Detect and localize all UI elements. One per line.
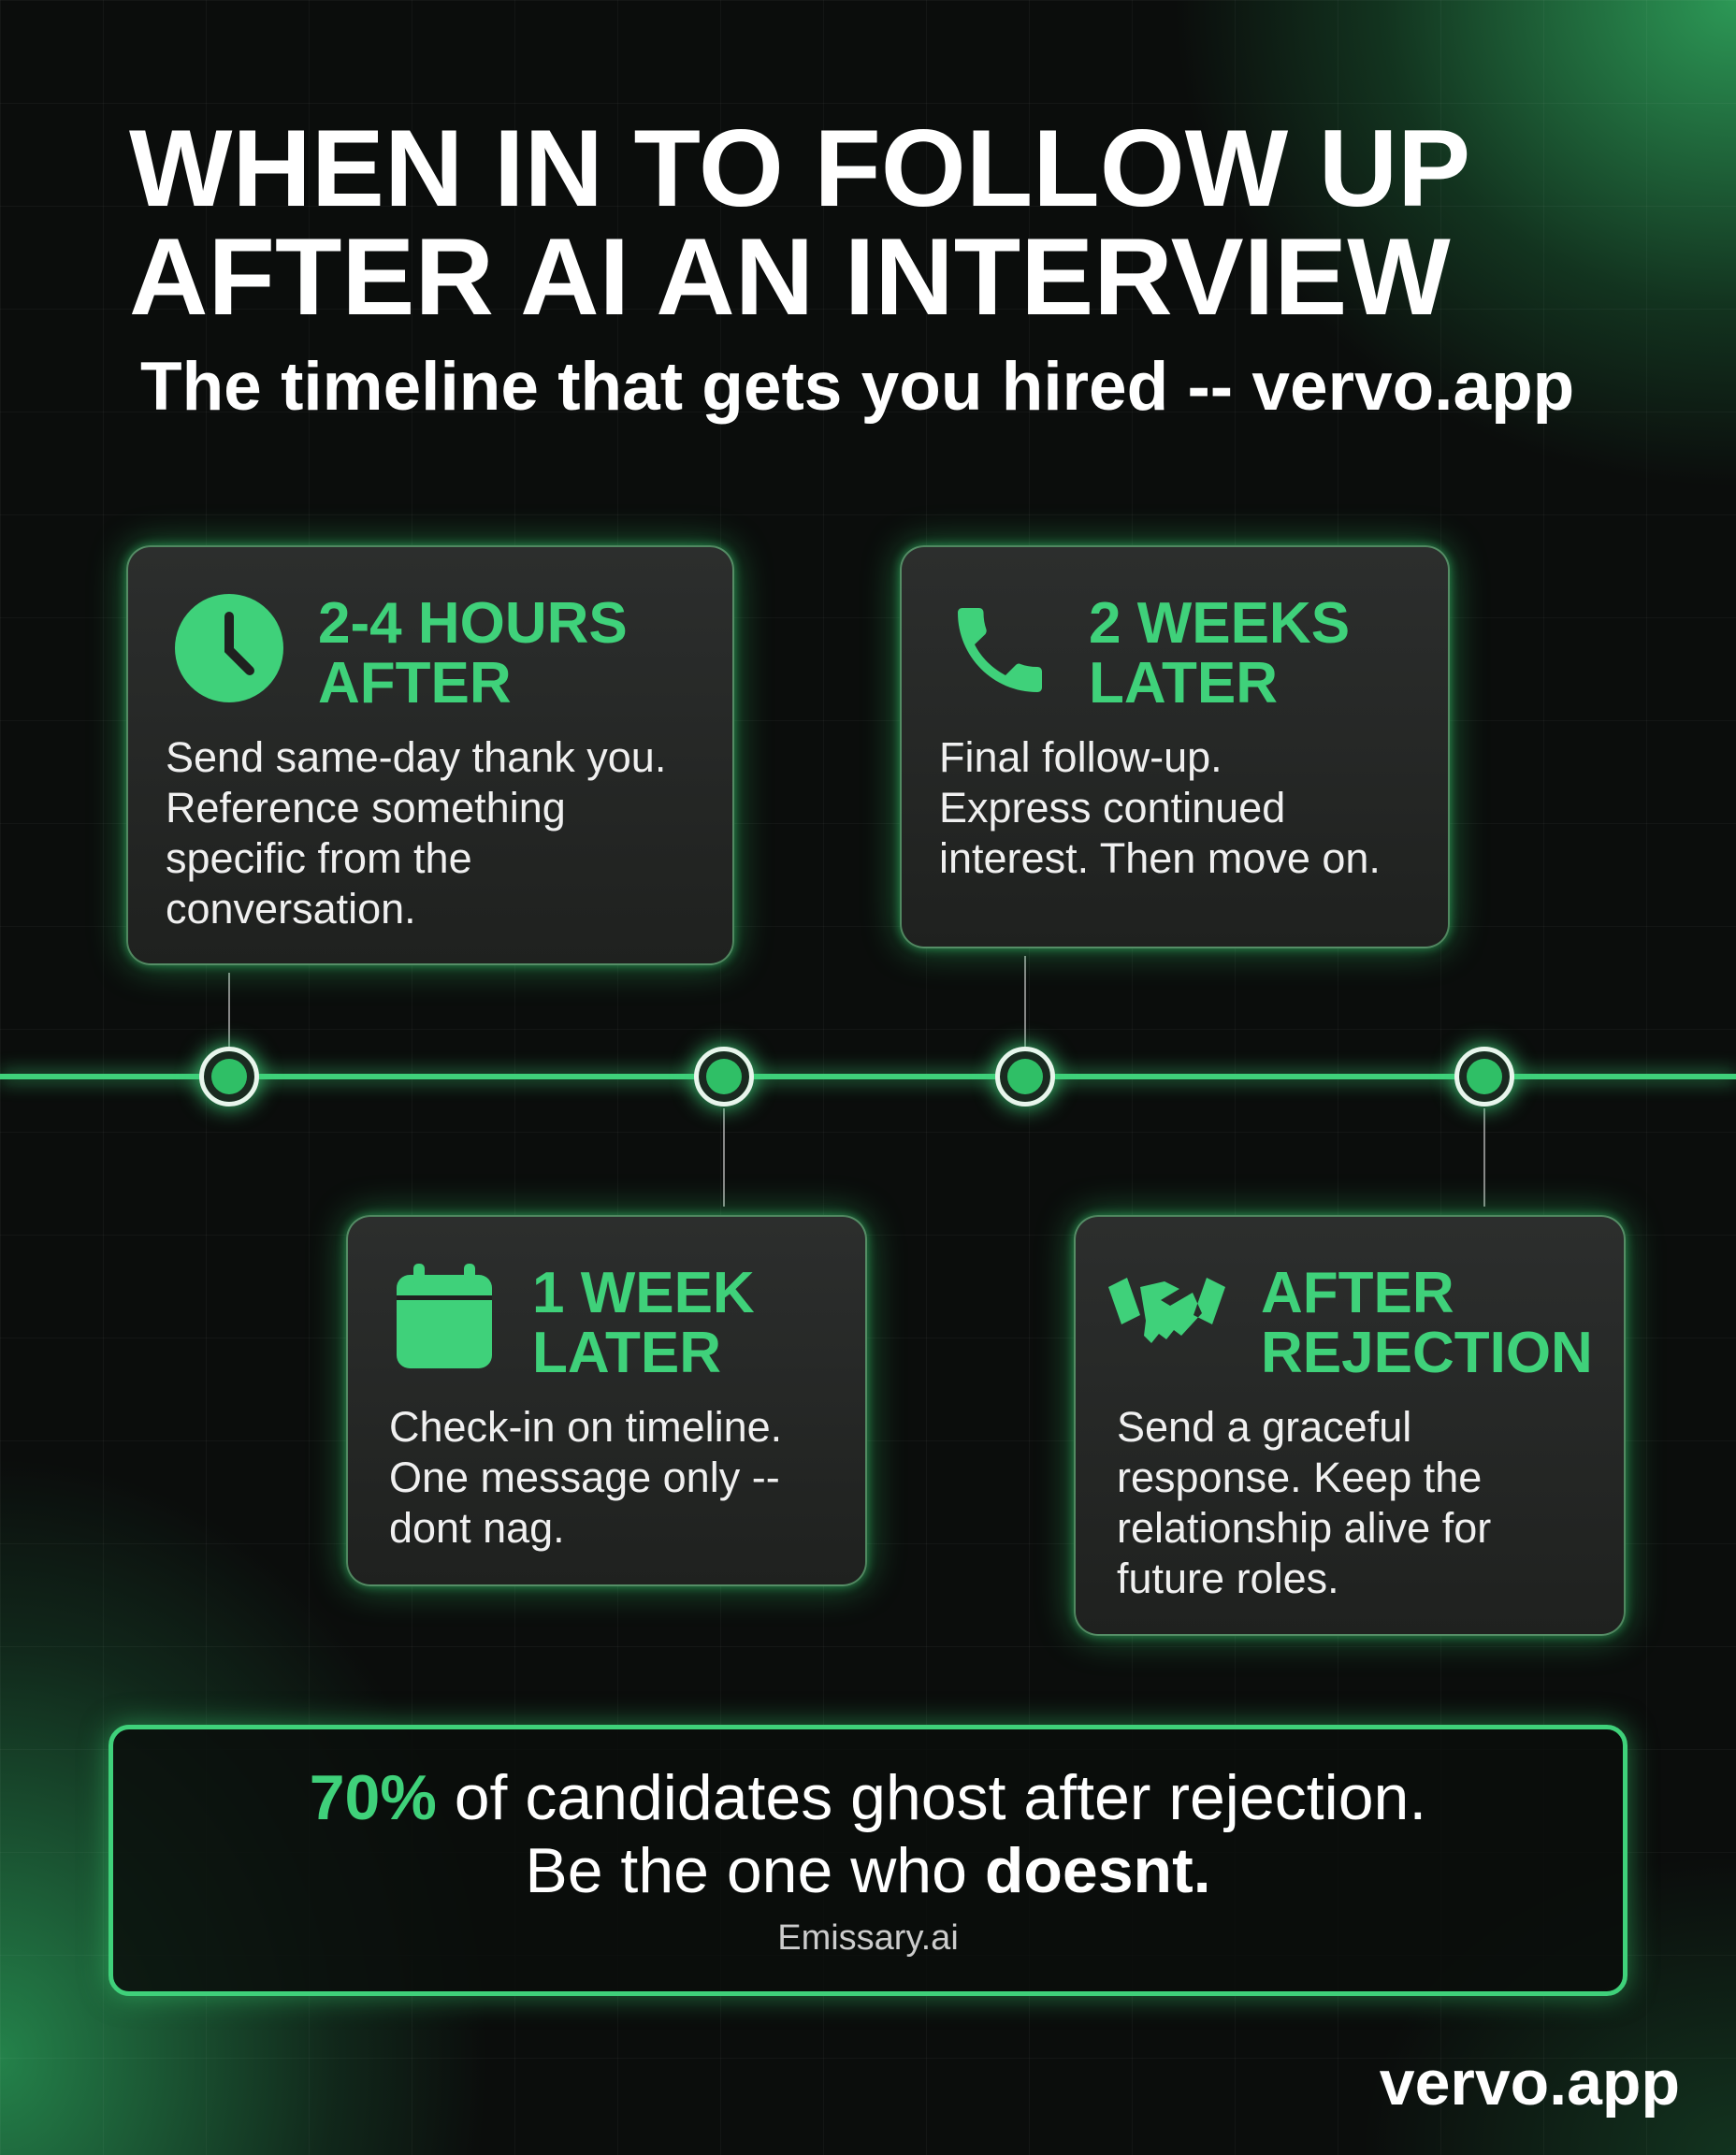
card: 2 weeks later xyxy=(900,545,1450,948)
title: AFTER AI AN INTERVIEW xyxy=(129,215,1451,338)
body text: response. Keep the xyxy=(1117,1454,1482,1501)
subtitle: The timeline that gets you hired -- vervo.app xyxy=(140,349,1574,425)
callout: statistic box xyxy=(108,1725,1628,1996)
body text: interest. Then move on. xyxy=(939,834,1381,882)
icon: handshake xyxy=(1108,1278,1225,1343)
body text: relationship alive for xyxy=(1117,1504,1491,1552)
body text xyxy=(166,733,666,933)
body text: Check-in on timeline. xyxy=(389,1403,782,1451)
body text xyxy=(1117,1403,1491,1602)
node 2 xyxy=(694,1047,754,1106)
icon: calendar xyxy=(397,1264,492,1368)
title: WHEN IN TO FOLLOW UP xyxy=(129,107,1470,229)
heading xyxy=(1261,1261,1593,1385)
body text xyxy=(389,1403,782,1552)
footer brand: vervo.app xyxy=(1380,2047,1680,2119)
body text: Final follow-up. xyxy=(939,733,1222,781)
heading: 2-4 HOURS xyxy=(318,591,628,656)
heading: REJECTION xyxy=(1261,1321,1593,1385)
body text: future roles. xyxy=(1117,1555,1339,1602)
node 1 xyxy=(199,1047,259,1106)
connector stems xyxy=(228,973,230,1052)
heading: LATER xyxy=(1089,651,1278,716)
icon: clock xyxy=(175,594,283,702)
body text: Express continued xyxy=(939,784,1285,832)
heading xyxy=(318,591,628,716)
heading: 2 WEEKS xyxy=(1089,591,1350,656)
body text: conversation. xyxy=(166,885,416,933)
node 4 xyxy=(1454,1047,1514,1106)
body text: One message only -- xyxy=(389,1454,780,1501)
body text: Send same-day thank you. xyxy=(166,733,666,781)
title xyxy=(129,107,1470,338)
timeline line xyxy=(0,1074,1736,1079)
body text: dont nag. xyxy=(389,1504,565,1552)
card: after rejection xyxy=(1074,1215,1626,1636)
heading: LATER xyxy=(532,1321,721,1385)
heading xyxy=(532,1261,755,1385)
statistic text: Be the one who doesnt. xyxy=(525,1835,1211,1906)
statistic text: 70% of candidates ghost after rejection. xyxy=(310,1762,1426,1833)
source: Emissary.ai xyxy=(777,1918,959,1958)
card: 1 week later xyxy=(346,1215,867,1586)
node 3 xyxy=(995,1047,1055,1106)
heading xyxy=(1089,591,1350,716)
card: 2-4 hours after xyxy=(126,545,734,965)
body text xyxy=(939,733,1381,882)
heading: AFTER xyxy=(1261,1261,1454,1325)
icon: phone xyxy=(958,608,1042,692)
body text: Send a graceful xyxy=(1117,1403,1411,1451)
body text: Reference something xyxy=(166,784,566,832)
heading: 1 WEEK xyxy=(532,1261,755,1325)
statistic text xyxy=(310,1762,1426,1906)
heading: AFTER xyxy=(318,651,512,716)
body text: specific from the xyxy=(166,834,472,882)
